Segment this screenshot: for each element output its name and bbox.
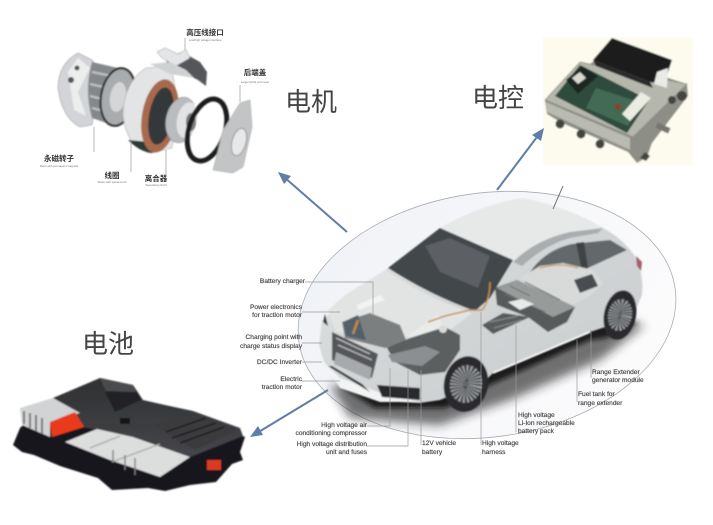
controller: black cover (593, 38, 672, 84)
car labels: Li-Ion rechargeable (518, 420, 575, 427)
motor: stator housing (123, 66, 176, 153)
motor labels: Low/high voltage interface (189, 38, 222, 42)
car labels: Power electronics (250, 304, 303, 311)
motor: high voltage connector (166, 52, 207, 86)
car labels: conditioning compressor (296, 430, 368, 437)
motor labels: 线圈 (104, 170, 120, 180)
arrow: to controller (497, 128, 544, 190)
car labels: battery pack (518, 428, 555, 435)
car labels (240, 278, 644, 456)
rear range extender bay (520, 263, 603, 305)
car labels: Battery charger (260, 278, 306, 285)
panel: motor exploded view (58, 48, 252, 173)
controller: connectors (556, 91, 687, 161)
motor labels: 永磁转子 (44, 153, 74, 163)
motor labels: Rotor with permanent magnets (40, 164, 79, 168)
hood (328, 270, 472, 338)
panel: battery pack (13, 378, 245, 491)
rear wheel (599, 287, 641, 343)
arrow: to motor (278, 172, 347, 232)
car labels: Electric (280, 376, 303, 383)
motor labels: 后端盖 (244, 67, 267, 77)
motor: rear end cover (213, 100, 252, 173)
battery: red cells (50, 412, 84, 437)
left engine bay (342, 313, 408, 348)
arrow: to battery (250, 390, 328, 437)
car labels: harness (482, 449, 506, 456)
controller: green circuit board (555, 65, 649, 133)
motor labels: 离合器 (145, 173, 168, 183)
ellipse background (282, 168, 692, 462)
front wheel (439, 352, 493, 416)
motor labels: Large hybrid end cover (241, 80, 269, 84)
controller: case rim (545, 62, 687, 137)
roof pointer (553, 186, 563, 209)
car labels: battery (422, 449, 443, 456)
sill highlight (493, 332, 590, 373)
heading: battery: 电池 (82, 329, 134, 359)
tail light (636, 256, 642, 271)
motor labels: Stator with spooled coil (98, 180, 127, 184)
car labels: Range Extender (592, 369, 640, 376)
side windows (530, 240, 627, 278)
car labels: charge status display (240, 343, 303, 350)
motor: inner rotor shaft (162, 94, 200, 146)
battery: white modules (65, 429, 190, 477)
panel: controller module (543, 37, 693, 165)
grille (332, 332, 378, 378)
contact shadow (338, 322, 640, 408)
battery: red connector (207, 460, 221, 470)
car labels: range extender (578, 400, 623, 407)
car labels: High voltage air (321, 422, 368, 429)
heading: controller: 电控 (472, 83, 524, 113)
car labels: for traction motor (252, 312, 303, 319)
car body (319, 198, 642, 403)
battery: left cells (20, 398, 80, 437)
car labels: traction motor (262, 384, 303, 391)
car labels: High voltage (482, 440, 519, 447)
motor: copper windings (136, 76, 184, 156)
car labels: High voltage distribution (297, 441, 367, 448)
car labels: unit and fuses (326, 449, 368, 456)
windshield (388, 228, 513, 311)
front bumper (322, 360, 420, 402)
car labels: High voltage (518, 412, 555, 419)
orange cable (353, 320, 358, 334)
battery: top cover (53, 378, 243, 457)
motor: ribbed rotor drum (88, 62, 132, 127)
battery pack in car (495, 280, 575, 332)
motor labels (40, 27, 269, 187)
motor labels: 高压线接口 (186, 27, 224, 37)
panel: car in ellipse (240, 168, 692, 462)
ground shadow (330, 320, 645, 425)
battery: black base frame with feet (13, 418, 245, 491)
hood panel (408, 314, 444, 342)
right engine cutaway (387, 327, 460, 375)
controller: lower case (545, 56, 688, 163)
motor: rotor bracket (58, 53, 100, 127)
car labels: DC/DC Inverter (257, 359, 303, 366)
lower grille (377, 385, 420, 400)
motor labels: Separating clutch (145, 183, 167, 187)
car labels: generator module (592, 377, 644, 384)
car labels: 12V vehicle (422, 440, 456, 447)
car labels: Fuel tank for (578, 391, 615, 398)
roof (440, 198, 603, 262)
leader lines (302, 282, 591, 446)
motor: rotor face (96, 65, 140, 129)
car labels: Charging point with (246, 334, 302, 341)
heading: motor: 电机 (285, 87, 337, 117)
motor: black clutch ring (180, 94, 234, 166)
